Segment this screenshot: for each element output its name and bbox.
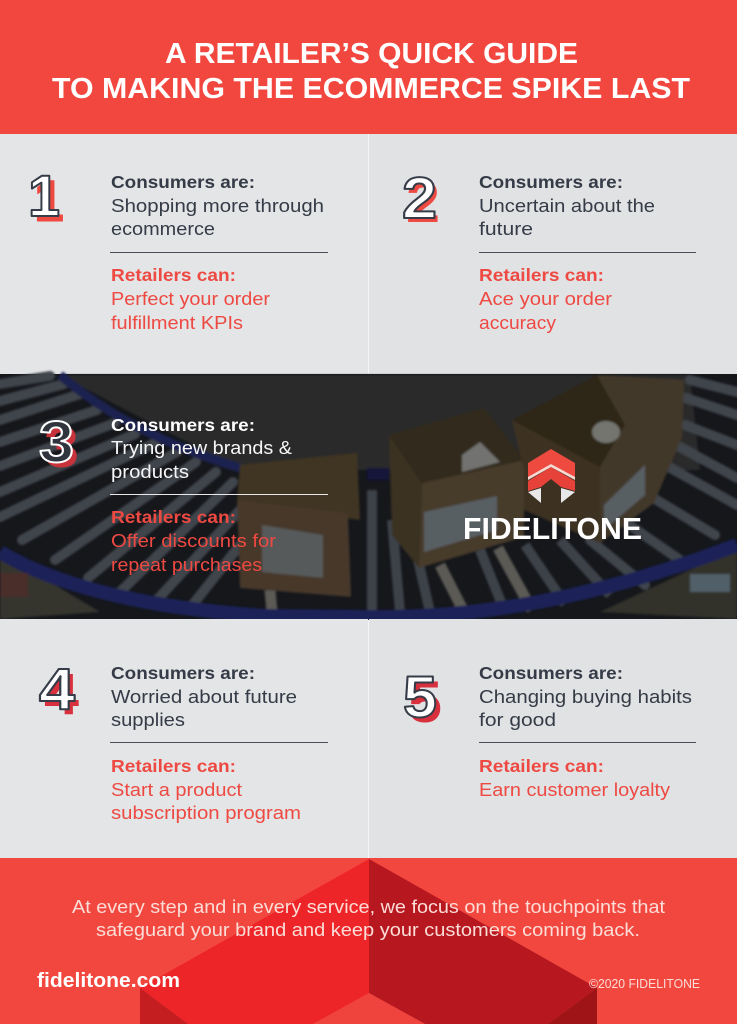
retailers text: Offer discounts for: [111, 530, 276, 551]
retailers text: [111, 507, 276, 575]
box right: [512, 375, 625, 467]
number 4: 4: [44, 662, 79, 727]
consumers text: Shopping more through: [111, 195, 324, 216]
number 5: 5: [408, 670, 442, 735]
retailers text: Ace your order: [479, 288, 612, 309]
panel 2: [369, 134, 737, 374]
consumers text: ecommerce: [111, 218, 215, 239]
retailers text: [479, 265, 612, 333]
retailers text: Retailers can:: [479, 265, 604, 285]
retailers text: Retailers can:: [111, 507, 236, 527]
consumers text: [111, 415, 293, 482]
consumers text: Consumers are:: [111, 663, 255, 683]
consumers text: [111, 663, 297, 730]
icon: chevrons: [528, 449, 575, 503]
footer message: [72, 896, 665, 940]
consumers text: Consumers are:: [479, 172, 623, 192]
header band: [0, 0, 737, 134]
retailers text: repeat purchases: [111, 554, 262, 575]
consumers text: Trying new brands &: [111, 437, 293, 458]
retailers text: Retailers can:: [111, 265, 236, 285]
consumers text: [479, 663, 692, 730]
Fidelitone logo: [463, 449, 642, 546]
consumers text: supplies: [111, 709, 185, 730]
retailers text: fulfillment KPIs: [111, 312, 243, 333]
retailers text: Retailers can:: [479, 756, 604, 776]
panel 3: conveyor photo: [0, 374, 737, 619]
rollers left: [0, 376, 240, 608]
title: TO MAKING THE ECOMMERCE SPIKE LAST: [52, 73, 690, 105]
box centre: [389, 408, 524, 483]
website: fidelitone.com: [37, 970, 180, 992]
number 2: 2: [406, 170, 440, 235]
consumers text: Consumers are:: [111, 415, 255, 435]
retailers text: subscription program: [111, 802, 301, 823]
footer band: [0, 858, 737, 1024]
consumers text: [479, 172, 655, 239]
number 5: 5: [403, 665, 437, 730]
photo: conveyor and boxes: [0, 375, 737, 619]
number 2: 2: [402, 166, 437, 231]
consumers text: Worried about future: [111, 686, 297, 707]
retailers text: [111, 265, 270, 333]
wordmark: FIDELITONE: [463, 511, 642, 546]
consumers text: for good: [479, 709, 556, 730]
number 3: 3: [44, 415, 79, 480]
footer chevron graphic: [140, 859, 597, 1024]
copyright: ©2020 FIDELITONE: [589, 977, 700, 991]
panel 1: [0, 134, 368, 374]
panel 5: [369, 619, 737, 858]
consumers text: Consumers are:: [111, 172, 255, 192]
panel 4: [0, 619, 368, 858]
title: [52, 38, 690, 105]
consumers text: Uncertain about the: [479, 195, 655, 216]
blue rails: [60, 375, 240, 468]
title: A RETAILER’S QUICK GUIDE: [165, 38, 578, 70]
retailers text: [479, 756, 671, 800]
retailers text: accuracy: [479, 312, 557, 333]
rollers bottom: [372, 490, 610, 612]
number 4: 4: [39, 657, 75, 722]
retailers text: Start a product: [111, 779, 242, 800]
footer message: At every step and in every service, we focus on the touchpoints that: [72, 896, 665, 917]
number 3: 3: [39, 410, 74, 475]
consumers text: Changing buying habits: [479, 686, 692, 707]
rollers right: [590, 380, 737, 585]
number 1: 1: [34, 169, 64, 234]
retailers text: Retailers can:: [111, 756, 236, 776]
retailers text: [111, 756, 301, 823]
number 1: 1: [28, 164, 60, 229]
consumers text: future: [479, 218, 533, 239]
consumers text: Consumers are:: [479, 663, 623, 683]
retailers text: Perfect your order: [111, 288, 270, 309]
retailers text: Earn customer loyalty: [479, 779, 671, 800]
box left: [237, 453, 360, 520]
footer message: safeguard your brand and keep your customers coming back.: [96, 919, 640, 940]
consumers text: products: [111, 461, 189, 482]
consumers text: [111, 172, 324, 239]
floor: [60, 375, 700, 470]
